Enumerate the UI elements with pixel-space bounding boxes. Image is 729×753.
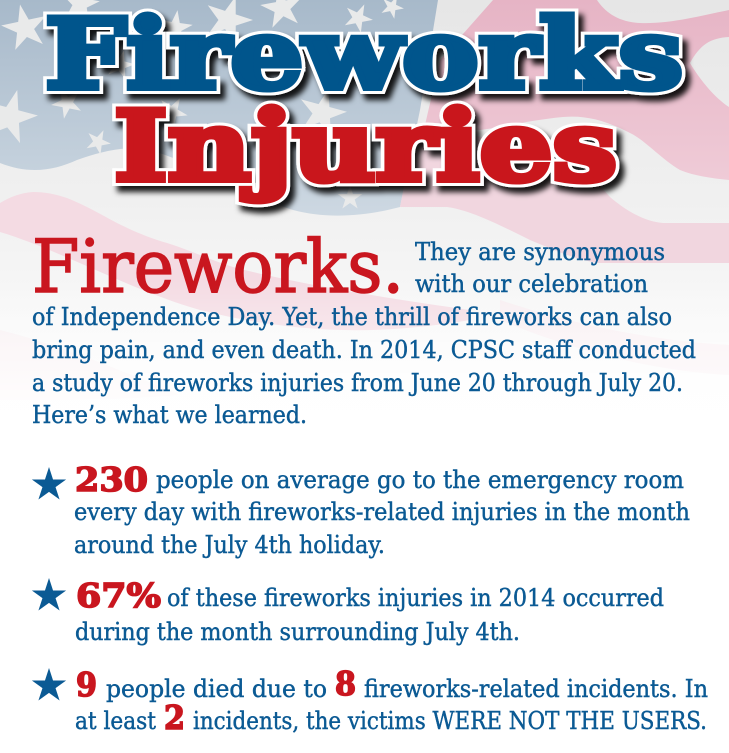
- number 8: 8: [335, 664, 356, 703]
- fact text: around the July 4th holiday.: [74, 531, 385, 559]
- intro text: Here’s what we learned.: [32, 401, 307, 429]
- intro text: of Independence Day. Yet, the thrill of fireworks can also: [32, 303, 672, 331]
- icon: star: [32, 467, 66, 500]
- fact text: people died due to: [106, 675, 327, 703]
- title line: Injuries: Injuries: [114, 90, 617, 203]
- fact: 67%: [32, 576, 664, 646]
- fact text: every day with fireworks-related injuries in the month: [74, 498, 690, 526]
- intro text: bring pain, and even death. In 2014, CPSC staff conducted: [32, 336, 696, 364]
- fact text: [75, 584, 664, 646]
- number 9: 9: [76, 665, 97, 704]
- fact: 230 people: [32, 460, 690, 559]
- canton stars: [0, 0, 407, 209]
- fact text: [75, 675, 708, 735]
- fact text: [74, 466, 690, 559]
- icon: star: [32, 578, 66, 611]
- fact text: fireworks-related incidents. In: [364, 675, 708, 703]
- flag background: [0, 0, 729, 430]
- intro paragraph: [32, 225, 696, 429]
- canton: [0, 0, 438, 216]
- fact text: of these fireworks injuries in 2014 occurred: [167, 584, 664, 612]
- intro text: with our celebration: [415, 270, 648, 298]
- intro text: They are synonymous: [415, 238, 665, 266]
- title line: Fireworks: Fireworks: [45, 0, 683, 111]
- intro text: a study of fireworks injuries from June 20 through July 20.: [32, 369, 683, 397]
- title: [45, 0, 683, 203]
- fact text: people on average go to the emergency room: [156, 466, 684, 494]
- number 2: 2: [164, 698, 185, 737]
- intro heading: Fireworks.: Fireworks.: [32, 225, 404, 310]
- fact: 9 people died: [32, 664, 708, 737]
- number 230: 230: [75, 460, 148, 499]
- fact text: during the month surrounding July 4th.: [75, 618, 520, 646]
- number 67%: 67%: [76, 576, 161, 615]
- icon: star: [32, 668, 66, 701]
- title line: Injuries: Injuries: [114, 90, 617, 203]
- fact text: at least: [75, 707, 156, 735]
- title line: Fireworks: Fireworks: [45, 0, 683, 111]
- intro text: [32, 238, 696, 429]
- red stripes: [425, 0, 729, 180]
